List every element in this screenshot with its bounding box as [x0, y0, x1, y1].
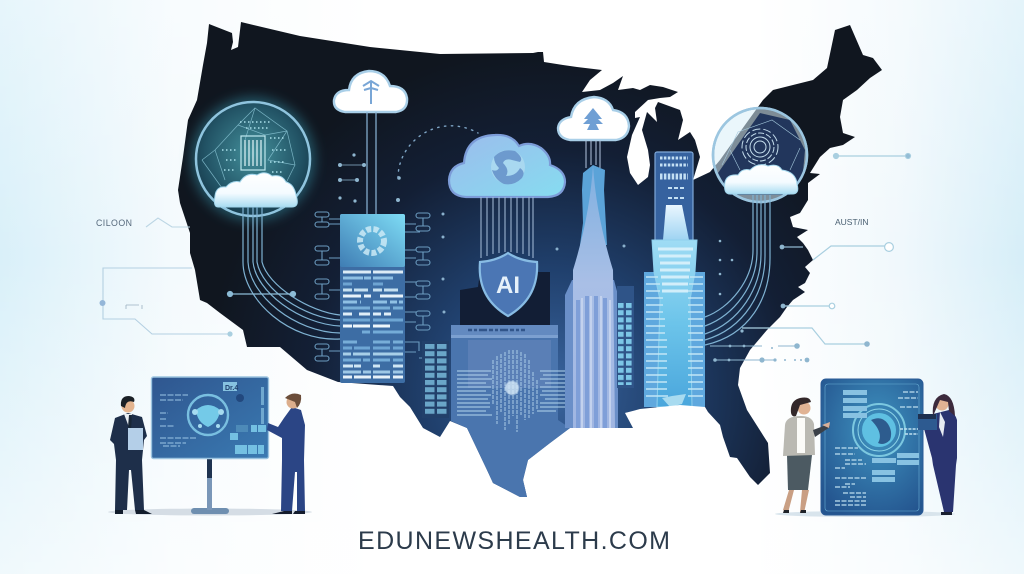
AI shield: [480, 253, 537, 316]
dome cloud: [214, 173, 297, 207]
bottom edge cutoff: [625, 405, 705, 414]
tablet ring icon: [853, 404, 905, 456]
center data building: [451, 325, 570, 497]
icon: arrow tree: [583, 108, 603, 130]
icon: arrow: [363, 81, 379, 104]
large tablet display: [821, 379, 923, 515]
screen ring icon: [188, 395, 228, 435]
right skyscraper: [644, 152, 705, 407]
right dome wires: [705, 195, 770, 345]
woman right: [918, 394, 957, 515]
right connector glyphs: [405, 213, 430, 358]
spire skyscraper: [565, 165, 634, 428]
small window block: [422, 341, 449, 418]
left circuit line: [100, 268, 233, 337]
woman left: [783, 398, 830, 513]
dark building behind shield: [460, 272, 550, 326]
label: Ciloon: CILOON: [96, 218, 132, 228]
right leader line top: [833, 153, 911, 159]
spire stripes: [578, 296, 605, 428]
tower data rows: [343, 272, 403, 377]
right leader line middle: [780, 243, 893, 260]
man left: [110, 396, 152, 514]
left leader line: [146, 218, 190, 227]
right leader line lower: [781, 303, 835, 309]
right dome fingerprint: [722, 120, 800, 170]
dumbbell connector: [227, 291, 296, 297]
tablet: [128, 428, 143, 450]
dots between tower and center: [442, 212, 626, 314]
tower radial icon: [360, 229, 384, 253]
left connector glyphs: [315, 212, 340, 361]
site name: EDUNEWSHEALTH.COM: [358, 527, 670, 555]
floor shadow left: [108, 508, 312, 516]
dotted arc: [398, 126, 478, 178]
dome server chip: [222, 122, 286, 172]
right dots in map: [719, 240, 733, 295]
cloud to tower lines: [367, 112, 376, 214]
code visual: [457, 350, 569, 432]
screen text lines: [160, 395, 196, 446]
floor shadow right: [775, 511, 955, 517]
dotted data lines: [710, 343, 809, 363]
map of the United States: [178, 22, 882, 497]
small node dots near tower: [338, 154, 400, 202]
tablet bars: [843, 390, 919, 482]
presentation screen: [152, 377, 268, 514]
right dome cloud: [725, 165, 798, 194]
right cloud dome: [713, 108, 807, 202]
right tower stripes: [658, 249, 693, 291]
left dome wires: [243, 207, 340, 339]
right tower crown: [655, 152, 693, 244]
spire cloud lines: [586, 140, 600, 168]
right circuit line: [740, 328, 870, 347]
shield text: AI: [496, 272, 520, 299]
label: Austin: AUST/IN: [835, 217, 869, 227]
icon: globe: [491, 150, 525, 184]
center cloud with globe: [449, 135, 565, 197]
left cloud dome: [191, 97, 315, 221]
server tower: [340, 214, 405, 383]
cloud to shield lines: [481, 197, 533, 258]
tablet code lines: [835, 392, 918, 505]
man right: [267, 394, 305, 514]
spire cloud: [558, 97, 629, 140]
screen label: Dr.4: [225, 385, 238, 392]
dome network lines: [202, 108, 295, 188]
screen widgets: [230, 387, 266, 454]
spire top glass: [580, 165, 607, 245]
top cloud with arrow: [334, 71, 407, 112]
